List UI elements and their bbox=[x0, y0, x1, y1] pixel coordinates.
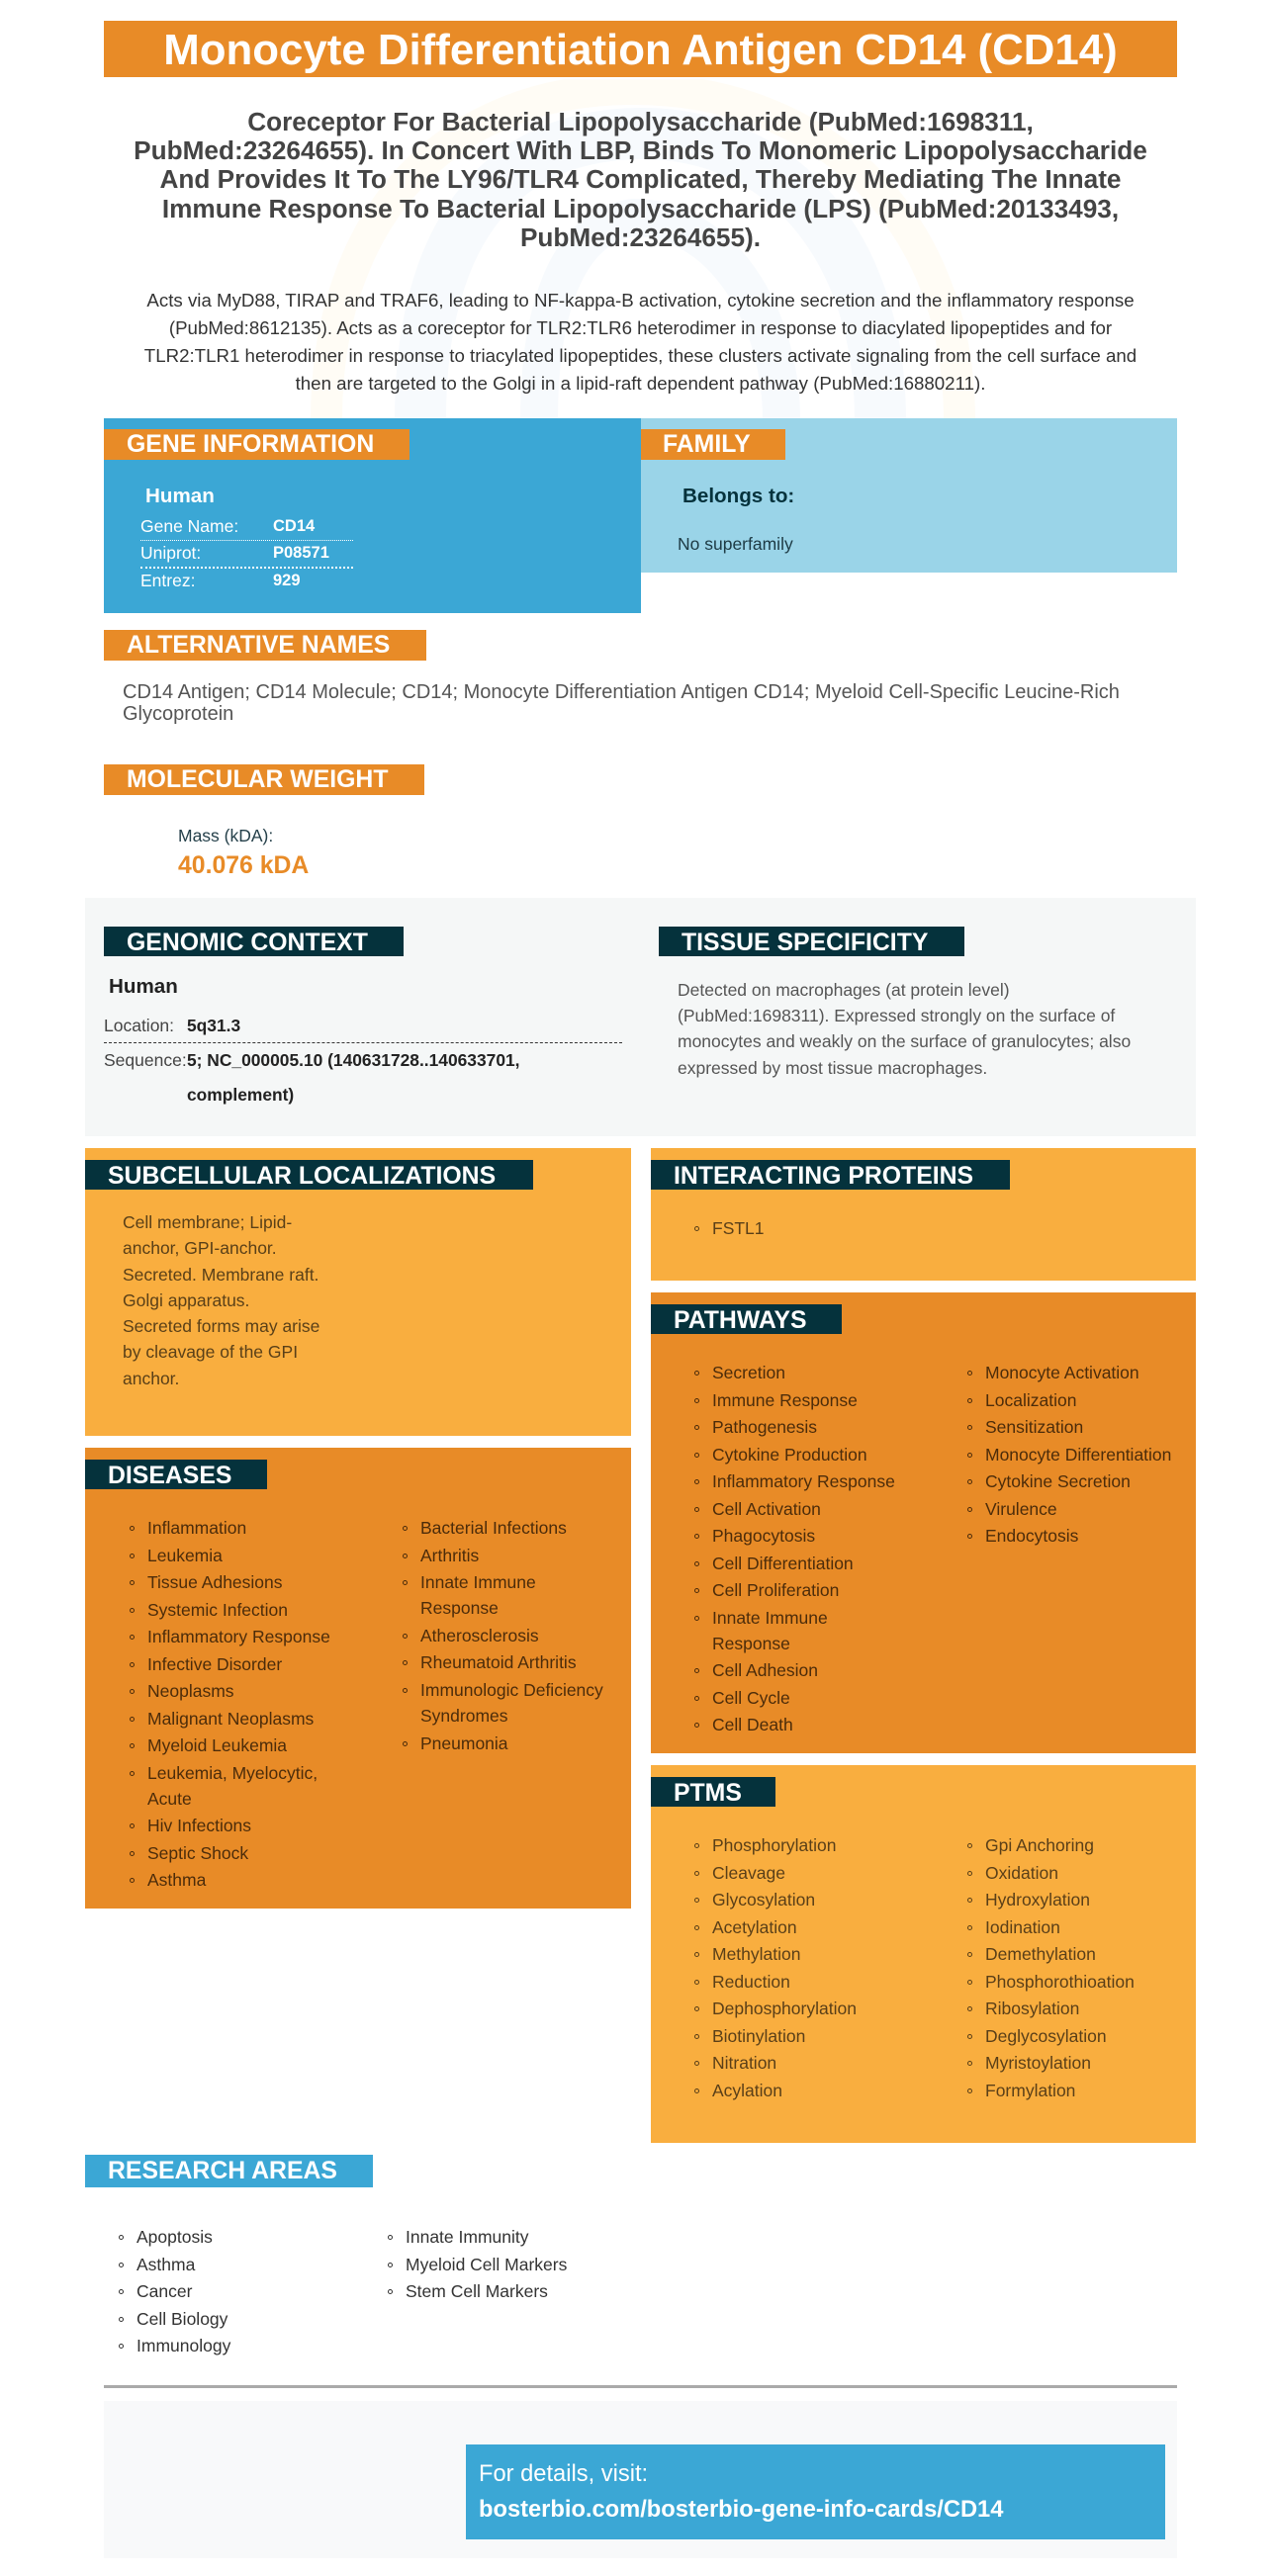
subtitle: function summary: Immune Response To Bacterial Lipopolysaccharide (LPS) (PubMed:20133493, bbox=[162, 194, 1119, 223]
research list column 1: Asthma bbox=[136, 2255, 195, 2274]
call to action box bbox=[466, 2444, 1165, 2539]
mass value: 40.076 kDA bbox=[178, 852, 309, 879]
localization text: Cell membrane; Lipid- bbox=[123, 1212, 292, 1232]
protein list: FSTL1 bbox=[712, 1218, 765, 1238]
title: Monocyte Differentiation Antigen CD14 (CD14) bbox=[163, 26, 1118, 74]
pathways list column 2: Endocytosis bbox=[985, 1526, 1078, 1546]
research list column 2 bbox=[388, 2227, 567, 2301]
pathways list column 1: Cell Death bbox=[712, 1715, 793, 1734]
subtitle: function summary: And Provides It To The LY96/TLR4 Complicated, Thereby Mediating The Innate bbox=[160, 164, 1122, 194]
ptms list column 2: Formylation bbox=[985, 2081, 1075, 2100]
pathways list column 2: Monocyte Activation bbox=[985, 1363, 1139, 1382]
sequence row: Sequence: bbox=[104, 1050, 187, 1070]
pathways list column 2 bbox=[967, 1363, 1171, 1546]
ptms list column 2: Demethylation bbox=[985, 1944, 1096, 1964]
pathways list column 1: Inflammatory Response bbox=[712, 1471, 895, 1491]
research list column 2: Innate Immunity bbox=[406, 2227, 528, 2247]
mass label: Mass (kDA): bbox=[178, 826, 273, 845]
species label: Human bbox=[109, 975, 178, 998]
gene name row bbox=[140, 515, 353, 541]
heading: research areas bbox=[85, 2155, 373, 2187]
species label: Human bbox=[145, 485, 215, 507]
pathways list column 1: Innate Immune bbox=[712, 1608, 828, 1628]
pathways list column 2: Virulence bbox=[985, 1499, 1057, 1519]
uniprot row: P08571 bbox=[273, 544, 329, 562]
diseases list column 1: Acute bbox=[147, 1789, 192, 1809]
ptms list column 2: Hydroxylation bbox=[985, 1890, 1090, 1910]
visit label: For details, visit: bbox=[479, 2461, 648, 2487]
diseases list column 1: Leukemia, Myelocytic, bbox=[147, 1762, 318, 1782]
ptms list column 2: Gpi Anchoring bbox=[985, 1835, 1094, 1855]
pathways list column 2: Monocyte Differentiation bbox=[985, 1444, 1171, 1464]
pathways list column 1: Immune Response bbox=[712, 1390, 858, 1410]
diseases list column 1: Inflammation bbox=[147, 1518, 246, 1538]
ptms list column 1: Dephosphorylation bbox=[712, 1999, 857, 2018]
ptms list column 2: Ribosylation bbox=[985, 1999, 1079, 2018]
pathways list column 1: Cell Differentiation bbox=[712, 1553, 854, 1572]
pathways list column 1: Cell Proliferation bbox=[712, 1580, 839, 1600]
location row bbox=[104, 1015, 622, 1043]
tissue specificity text: Detected on macrophages (at protein level) bbox=[678, 980, 1010, 1000]
gene name row: CD14 bbox=[273, 517, 315, 535]
pathways list column 2: Localization bbox=[985, 1390, 1076, 1410]
description paragraph: (PubMed:8612135). Acts as a coreceptor for TLR2:TLR6 heterodimer in response to diacylated lipopeptides and for bbox=[169, 317, 1112, 338]
ptms list column 1: Nitration bbox=[712, 2053, 776, 2073]
heading: alternative names: ALTERNATIVE NAMES bbox=[127, 632, 390, 659]
diseases list column 2: Response bbox=[420, 1598, 499, 1618]
ptms list column 1: Glycosylation bbox=[712, 1890, 815, 1910]
pathways list column 1: Pathogenesis bbox=[712, 1417, 817, 1437]
pathways list column 1: Phagocytosis bbox=[712, 1526, 815, 1546]
panel: gene information bbox=[104, 418, 641, 613]
heading: interacting proteins: INTERACTING PROTEINS bbox=[674, 1163, 973, 1190]
localization text: anchor, GPI-anchor. bbox=[123, 1238, 277, 1258]
panel: interacting proteins bbox=[651, 1148, 1196, 1281]
heading: genomic context: GENOMIC CONTEXT bbox=[127, 930, 368, 956]
ptms list column 1: Reduction bbox=[712, 1972, 790, 1992]
ptms list column 2: Iodination bbox=[985, 1916, 1060, 1936]
heading: family: FAMILY bbox=[663, 431, 751, 458]
pathways list column 1: Cell Cycle bbox=[712, 1688, 790, 1708]
diseases list column 1: Neoplasms bbox=[147, 1681, 234, 1701]
diseases list column 1: Hiv Infections bbox=[147, 1816, 251, 1835]
pathways list column 1: Cytokine Production bbox=[712, 1444, 867, 1464]
research list column 2: Myeloid Cell Markers bbox=[406, 2255, 567, 2274]
ptms list column 2: Phosphorothioation bbox=[985, 1972, 1135, 1992]
alternative names text bbox=[123, 680, 1120, 725]
description paragraph: then are targeted to the Golgi in a lipid-raft dependent pathway (PubMed:16880211). bbox=[296, 373, 985, 394]
ptms list column 1: Cleavage bbox=[712, 1863, 785, 1883]
diseases list column 1: Leukemia bbox=[147, 1545, 223, 1564]
diseases list column 1: Asthma bbox=[147, 1870, 206, 1890]
diseases list column 2: Rheumatoid Arthritis bbox=[420, 1652, 577, 1672]
subtitle: function summary: PubMed:23264655). In Concert With LBP, Binds To Monomeric Lipopolysaccharide bbox=[134, 135, 1147, 165]
localization text: Golgi apparatus. bbox=[123, 1290, 249, 1310]
heading: pathways bbox=[651, 1304, 842, 1334]
heading: ptms bbox=[651, 1777, 775, 1807]
pathways list column 2: Cytokine Secretion bbox=[985, 1471, 1131, 1491]
ptms list column 1: Acetylation bbox=[712, 1916, 797, 1936]
alternative names text: Glycoprotein bbox=[123, 703, 233, 725]
diseases list column 2: Pneumonia bbox=[420, 1733, 508, 1753]
localization text: anchor. bbox=[123, 1369, 179, 1388]
heading: pathways: PATHWAYS bbox=[674, 1307, 807, 1334]
heading: subcellular localizations: SUBCELLULAR LOCALIZATIONS bbox=[108, 1163, 496, 1190]
panel: research areas bbox=[85, 2155, 567, 2355]
url: bosterbio.com/bosterbio-gene-info-cards/CD14 bbox=[479, 2497, 1003, 2523]
ptms list column 1: Phosphorylation bbox=[712, 1835, 837, 1855]
tissue specificity text: (PubMed:1698311). Expressed strongly on the surface of bbox=[678, 1006, 1115, 1025]
panel: ptms bbox=[651, 1765, 1196, 2143]
diseases list column 2: Arthritis bbox=[420, 1545, 479, 1564]
research list column 1: Apoptosis bbox=[136, 2227, 213, 2247]
ptms list column 1: Biotinylation bbox=[712, 2025, 805, 2045]
research list column 1: Cell Biology bbox=[136, 2308, 228, 2328]
diseases list column 1: Inflammatory Response bbox=[147, 1627, 330, 1646]
localization text bbox=[123, 1212, 319, 1388]
localization text: by cleavage of the GPI bbox=[123, 1342, 298, 1362]
panel: family bbox=[641, 418, 1177, 573]
ptms list column 1: Acylation bbox=[712, 2081, 782, 2100]
diseases list column 1: Septic Shock bbox=[147, 1843, 248, 1863]
diseases list column 2: Innate Immune bbox=[420, 1572, 536, 1592]
description paragraph: Acts via MyD88, TIRAP and TRAF6, leading to NF-kappa-B activation, cytokine secretion and the inflammatory response bbox=[146, 290, 1135, 311]
tissue specificity text: expressed by most tissue macrophages. bbox=[678, 1058, 987, 1078]
research list column 1: Immunology bbox=[136, 2336, 230, 2355]
panel: subcellular localizations bbox=[85, 1148, 631, 1436]
panel: diseases bbox=[85, 1448, 631, 1909]
heading: family bbox=[641, 429, 785, 460]
footer panel bbox=[104, 2401, 1177, 2558]
description paragraph bbox=[144, 290, 1137, 394]
heading: ptms: PTMS bbox=[674, 1780, 742, 1807]
location row: Location: bbox=[104, 1016, 174, 1035]
subtitle: function summary: PubMed:23264655). bbox=[520, 222, 761, 252]
heading: molecular weight: MOLECULAR WEIGHT bbox=[127, 766, 388, 793]
ptms list column 2: Deglycosylation bbox=[985, 2025, 1107, 2045]
heading: research areas: RESEARCH AREAS bbox=[108, 2158, 337, 2184]
heading: diseases: DISEASES bbox=[108, 1463, 231, 1489]
pathways list column 1: Secretion bbox=[712, 1363, 785, 1382]
diseases list column 1: Myeloid Leukemia bbox=[147, 1735, 287, 1755]
heading: tissue specificity: TISSUE SPECIFICITY bbox=[682, 930, 928, 956]
panel: genomic context and tissue specificity bbox=[85, 898, 1196, 1136]
belongs to label: Belongs to: bbox=[682, 485, 794, 507]
tissue specificity text bbox=[678, 980, 1131, 1078]
uniprot row bbox=[140, 542, 353, 569]
uniprot row: Uniprot: bbox=[140, 543, 201, 563]
entrez row: 929 bbox=[273, 572, 301, 589]
localization text: Secreted forms may arise bbox=[123, 1316, 319, 1336]
entrez row: Entrez: bbox=[140, 571, 195, 590]
diseases list column 1: Malignant Neoplasms bbox=[147, 1709, 314, 1729]
pathways list column 1: Response bbox=[712, 1634, 790, 1653]
subtitle: function summary: Coreceptor For Bacterial Lipopolysaccharide (PubMed:1698311, bbox=[247, 107, 1034, 136]
diseases list column 2 bbox=[403, 1518, 603, 1753]
watermark logo bbox=[311, 79, 975, 418]
heading: diseases bbox=[85, 1460, 267, 1489]
subtitle: function summary bbox=[134, 107, 1147, 252]
superfamily text: No superfamily bbox=[678, 534, 793, 554]
pathways list column 1: Cell Activation bbox=[712, 1499, 821, 1519]
diseases list column 2: Atherosclerosis bbox=[420, 1626, 539, 1645]
alternative names text: CD14 Antigen; CD14 Molecule; CD14; Monocyte Differentiation Antigen CD14; Myeloid Cell-Specific Leucine-Rich bbox=[123, 680, 1120, 702]
research list column 2: Stem Cell Markers bbox=[406, 2281, 548, 2301]
diseases list column 1 bbox=[130, 1518, 330, 1890]
diseases list column 1: Tissue Adhesions bbox=[147, 1572, 283, 1592]
location row: 5q31.3 bbox=[187, 1016, 240, 1035]
pathways list column 1: Cell Adhesion bbox=[712, 1660, 818, 1680]
ptms list column 2 bbox=[967, 1835, 1135, 2100]
ptms list column 1 bbox=[694, 1835, 857, 2100]
localization text: Secreted. Membrane raft. bbox=[123, 1265, 318, 1285]
entrez row bbox=[140, 571, 301, 590]
ptms list column 2: Myristoylation bbox=[985, 2053, 1091, 2073]
diseases list column 2: Syndromes bbox=[420, 1706, 508, 1726]
pathways list column 2: Sensitization bbox=[985, 1417, 1083, 1437]
panel: pathways bbox=[651, 1292, 1196, 1753]
diseases list column 2: Bacterial Infections bbox=[420, 1518, 567, 1538]
gene name row: Gene Name: bbox=[140, 516, 238, 536]
ptms list column 2: Oxidation bbox=[985, 1863, 1058, 1883]
ptms list column 1: Methylation bbox=[712, 1944, 801, 1964]
research list column 1: Cancer bbox=[136, 2281, 192, 2301]
diseases list column 1: Systemic Infection bbox=[147, 1600, 288, 1620]
pathways list column 1 bbox=[694, 1363, 895, 1734]
diseases list column 2: Immunologic Deficiency bbox=[420, 1680, 603, 1700]
diseases list column 1: Infective Disorder bbox=[147, 1653, 282, 1673]
research list column 1 bbox=[119, 2227, 231, 2355]
tissue specificity text: monocytes and weakly on the surface of granulocytes; also bbox=[678, 1031, 1131, 1051]
sequence row: 5; NC_000005.10 (140631728..140633701, bbox=[187, 1050, 520, 1070]
sequence row: complement) bbox=[187, 1085, 294, 1105]
description paragraph: TLR2:TLR1 heterodimer in response to triacylated lipopeptides, these clusters activate signaling from the cell surface and bbox=[144, 345, 1137, 366]
sequence row bbox=[104, 1050, 520, 1105]
heading: gene information: GENE INFORMATION bbox=[127, 431, 374, 458]
